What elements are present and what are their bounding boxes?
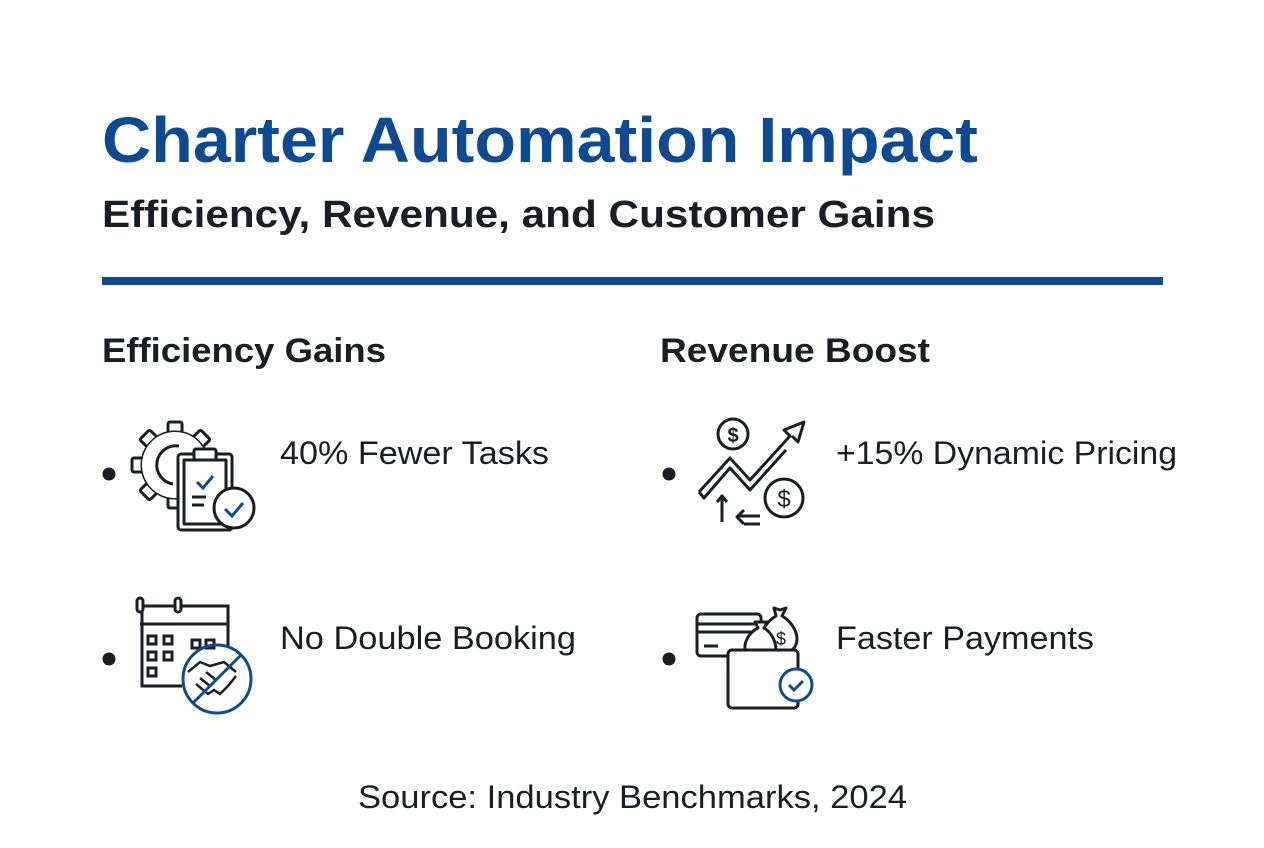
title: Charter Automation Impact (102, 104, 978, 176)
item: Faster Payments: $ (776, 629, 786, 649)
icon: rising arrow with coins (699, 419, 804, 524)
item: +15% Dynamic Pricing: +15% Dynamic Pricing (836, 435, 1177, 471)
item: No Double Booking: No Double Booking (280, 620, 576, 656)
subtitle: Efficiency, Revenue, and Customer Gains (102, 194, 935, 236)
item: Faster Payments (662, 608, 1094, 708)
item: +15% Dynamic Pricing (662, 419, 1177, 524)
item: +15% Dynamic Pricing: $ (727, 425, 739, 447)
icon: calendar with crossed handshake (137, 598, 236, 694)
item: No Double Booking (102, 598, 576, 713)
source note: Source: Industry Benchmarks, 2024 (358, 779, 907, 815)
icon: gear with clipboard (132, 422, 254, 530)
item: +15% Dynamic Pricing: $ (777, 486, 791, 513)
heading: Efficiency Gains: Efficiency Gains (102, 332, 386, 370)
icon: card, wallet, money bags (697, 608, 798, 708)
item: Faster Payments: Faster Payments (836, 620, 1094, 656)
heading: Revenue Boost: Revenue Boost (660, 332, 930, 370)
item: 40% Fewer Tasks: 40% Fewer Tasks (280, 435, 549, 471)
item: 40% Fewer Tasks (102, 422, 549, 530)
